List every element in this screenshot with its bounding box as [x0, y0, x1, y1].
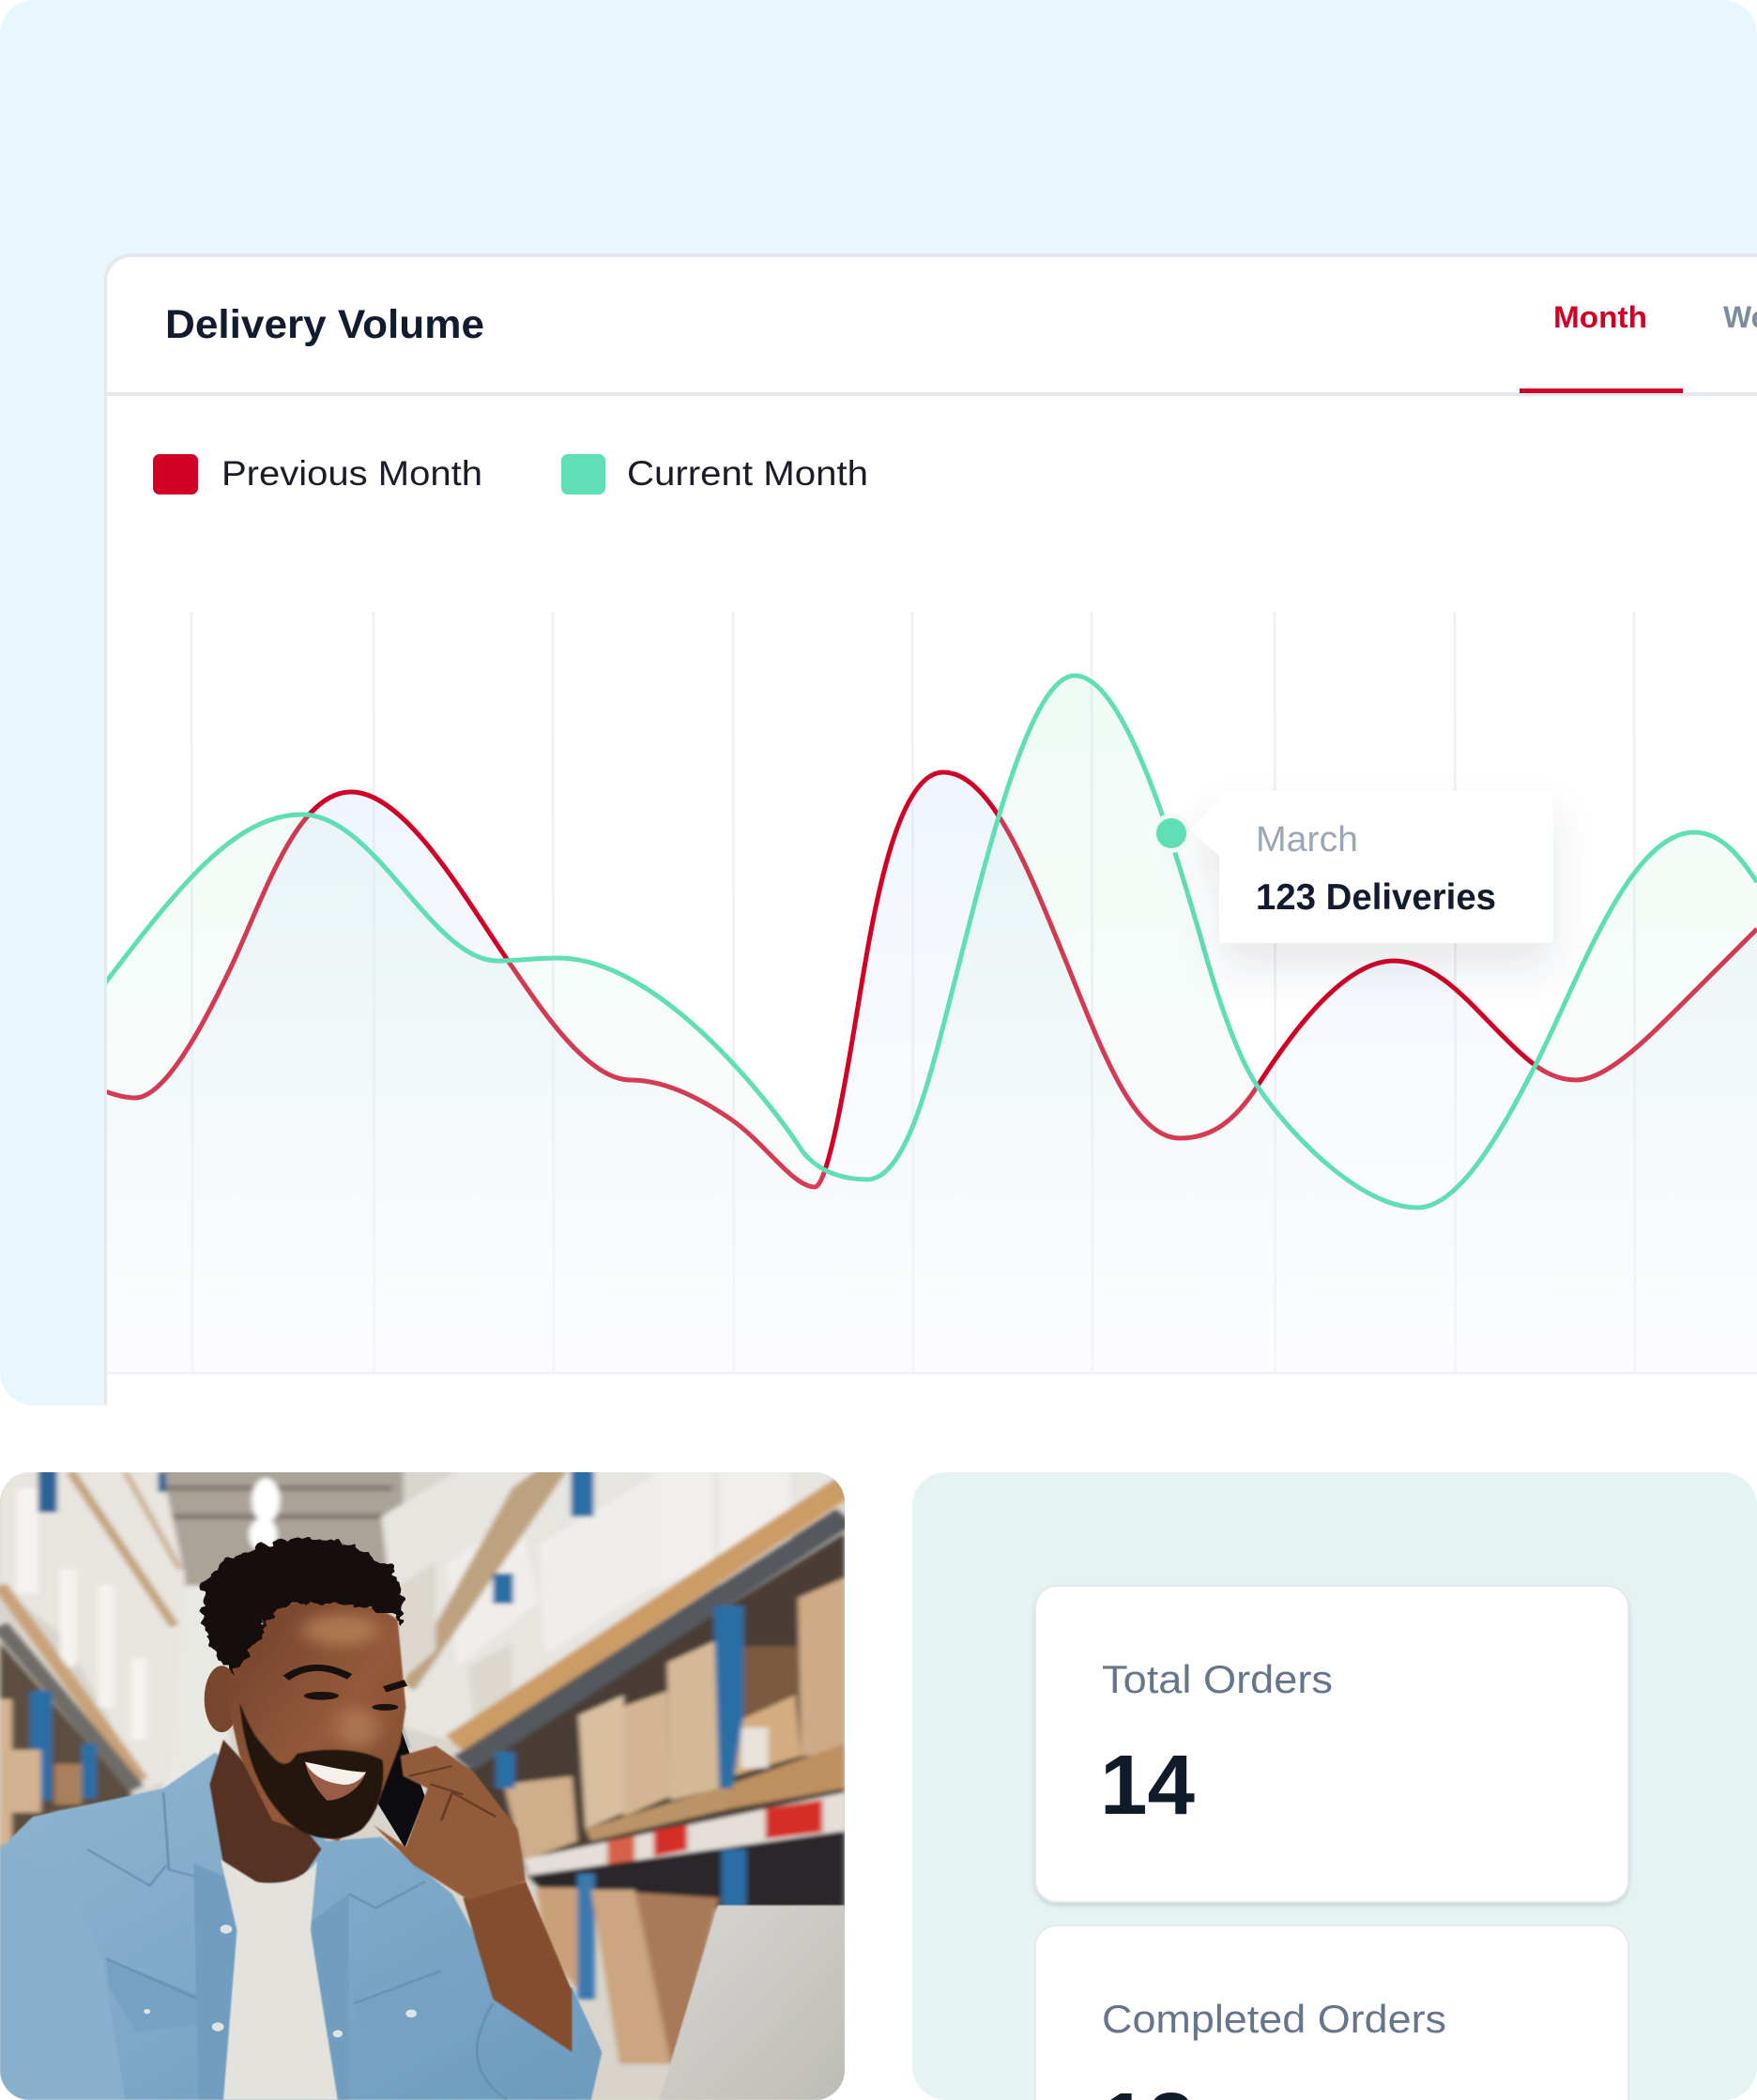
legend item: Current Month: Current Month	[627, 454, 868, 493]
card: Total Orders	[1034, 1585, 1629, 1903]
warehouse background	[0, 1464, 845, 2100]
t-shirt	[221, 1859, 338, 2100]
area: previous month	[244, 775, 1757, 1038]
tooltip month label: March	[1256, 820, 1358, 860]
face	[223, 1600, 405, 1841]
denim jacket	[0, 1753, 602, 2100]
phone	[375, 1727, 425, 1849]
header divider	[107, 392, 1757, 396]
value: 14: 14	[1100, 1739, 1195, 1833]
tooltip value: 123 Deliveries	[1256, 877, 1496, 918]
label: Completed Orders: Completed Orders	[1102, 1997, 1446, 2041]
eyes and brows	[286, 1667, 405, 1689]
buttons	[144, 1925, 417, 2037]
line chart	[101, 612, 1757, 1373]
tab: Month (active): Month	[1553, 300, 1647, 334]
line: previous month	[105, 772, 1757, 1187]
ear	[205, 1666, 233, 1732]
hair	[202, 1539, 403, 1673]
legend item: Current Month	[561, 454, 868, 495]
tooltip: March 123 Deliveries	[1191, 791, 1553, 943]
legend item: Previous Month	[153, 454, 482, 495]
panel: light blue chart background	[0, 0, 1757, 1406]
panel: delivery volume card	[101, 253, 1757, 1406]
forearm	[463, 1881, 572, 2052]
legend item: Previous Month: Previous Month	[222, 454, 482, 493]
person	[0, 1539, 602, 2100]
neck	[209, 1740, 321, 1883]
area: current month	[107, 677, 1757, 1190]
panel: order stats	[912, 1472, 1757, 2100]
marker dot on current month line	[1152, 814, 1191, 853]
heading: Delivery Volume: Delivery Volume	[165, 302, 484, 347]
label: Total Orders: Total Orders	[1102, 1657, 1333, 1701]
card: Completed Orders	[1034, 1925, 1629, 2100]
laptop	[659, 1905, 845, 2100]
beard	[239, 1703, 383, 1838]
photo: man on phone in warehouse	[0, 1464, 845, 2100]
tab: Month (active)	[1520, 300, 1683, 393]
line: current month	[101, 676, 1757, 1208]
legend	[153, 454, 868, 495]
hand	[374, 1745, 526, 1900]
mouth	[305, 1762, 366, 1801]
